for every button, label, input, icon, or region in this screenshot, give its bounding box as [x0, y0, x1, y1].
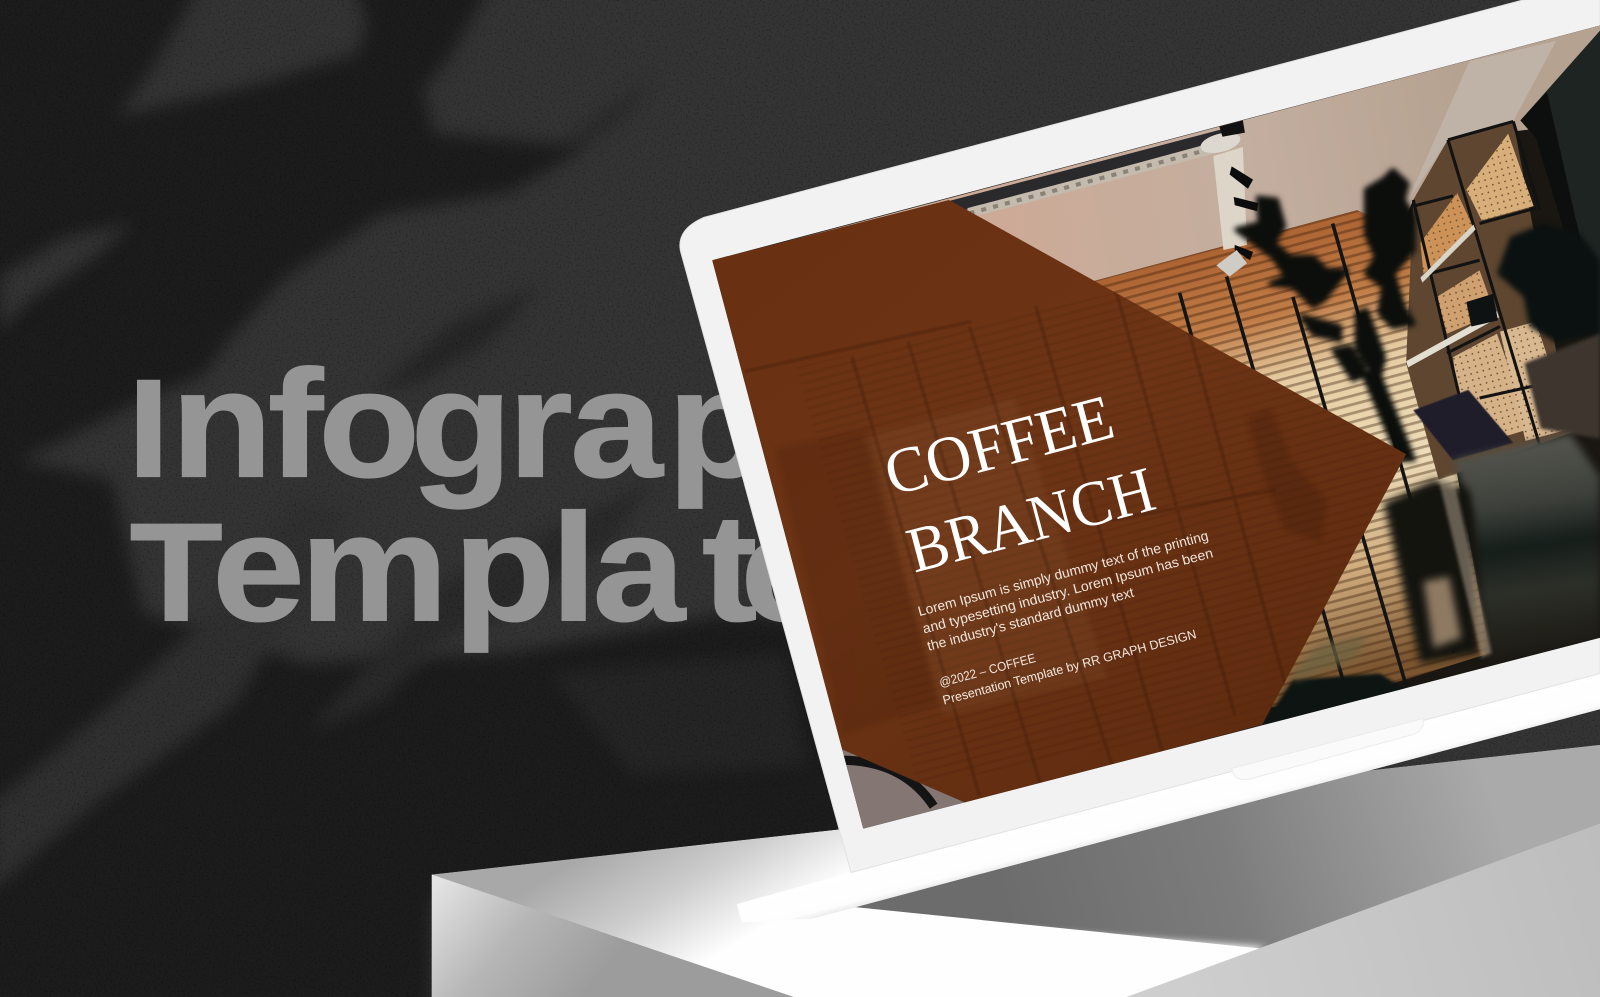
slide heading: [877, 376, 1162, 587]
foreground box: [1453, 434, 1600, 663]
title: [127, 338, 993, 653]
screen back in foreground: [1524, 334, 1600, 439]
wood shelf: [1406, 121, 1571, 480]
slide credit: @2022 – COFFEE: [938, 651, 1037, 690]
stool: [842, 748, 968, 828]
slide credit: Presentation Template by RR GRAPH DESIGN: [941, 627, 1198, 708]
ceiling: [712, 26, 1600, 281]
plinth top surface: [432, 745, 1600, 997]
title line 1: nfographic: [171, 338, 993, 509]
window posts: [1180, 223, 1454, 694]
plinth right face: [1127, 824, 1600, 997]
blurred vase and window frame: [1384, 480, 1480, 663]
slide body text: and typesetting industry. Lorem Ipsum has been: [921, 545, 1215, 636]
dark wall at right: [1520, 31, 1600, 347]
title line 2: emplate: [212, 482, 833, 653]
slide heading: COFFEE: [877, 381, 1121, 509]
screen: [704, 0, 1600, 847]
laptop cast shadow: [816, 740, 1600, 949]
laptop lid bezel: [680, 0, 1600, 873]
brown overlay: [704, 200, 1406, 803]
blinds: [1094, 210, 1490, 707]
background person silhouette: [1497, 223, 1600, 343]
hinge notch: [1232, 718, 1424, 780]
leaf shadows on wall: [0, 0, 878, 997]
faint seated figure: [1247, 408, 1327, 541]
plinth: [432, 740, 1600, 997]
wall highlight streaks: [0, 223, 806, 893]
foreground laptop silhouette: [1413, 390, 1513, 460]
slide body text: [916, 528, 1219, 654]
plant silhouette: [1237, 170, 1413, 459]
title line 1: I: [127, 350, 170, 506]
title line 2: T: [130, 494, 223, 650]
plinth left face: [432, 875, 794, 997]
interior showing through overlay: [745, 292, 1328, 796]
slide heading: BRANCH: [900, 453, 1162, 586]
slide text: [873, 365, 1234, 708]
slide body text: the industry's standard dummy text: [926, 585, 1136, 654]
ceiling bracket and spotlights: [1198, 120, 1258, 277]
slide body text: Lorem Ipsum is simply dummy text of the printing: [916, 528, 1210, 619]
taupe wall strip: [1406, 41, 1556, 204]
laptop base: [737, 671, 1600, 923]
laptop: [680, 0, 1600, 923]
ceiling rail: [949, 129, 1227, 210]
cafe photo: [704, 0, 1600, 847]
foreground table: [1263, 674, 1413, 725]
lit patch: [1054, 927, 1266, 948]
